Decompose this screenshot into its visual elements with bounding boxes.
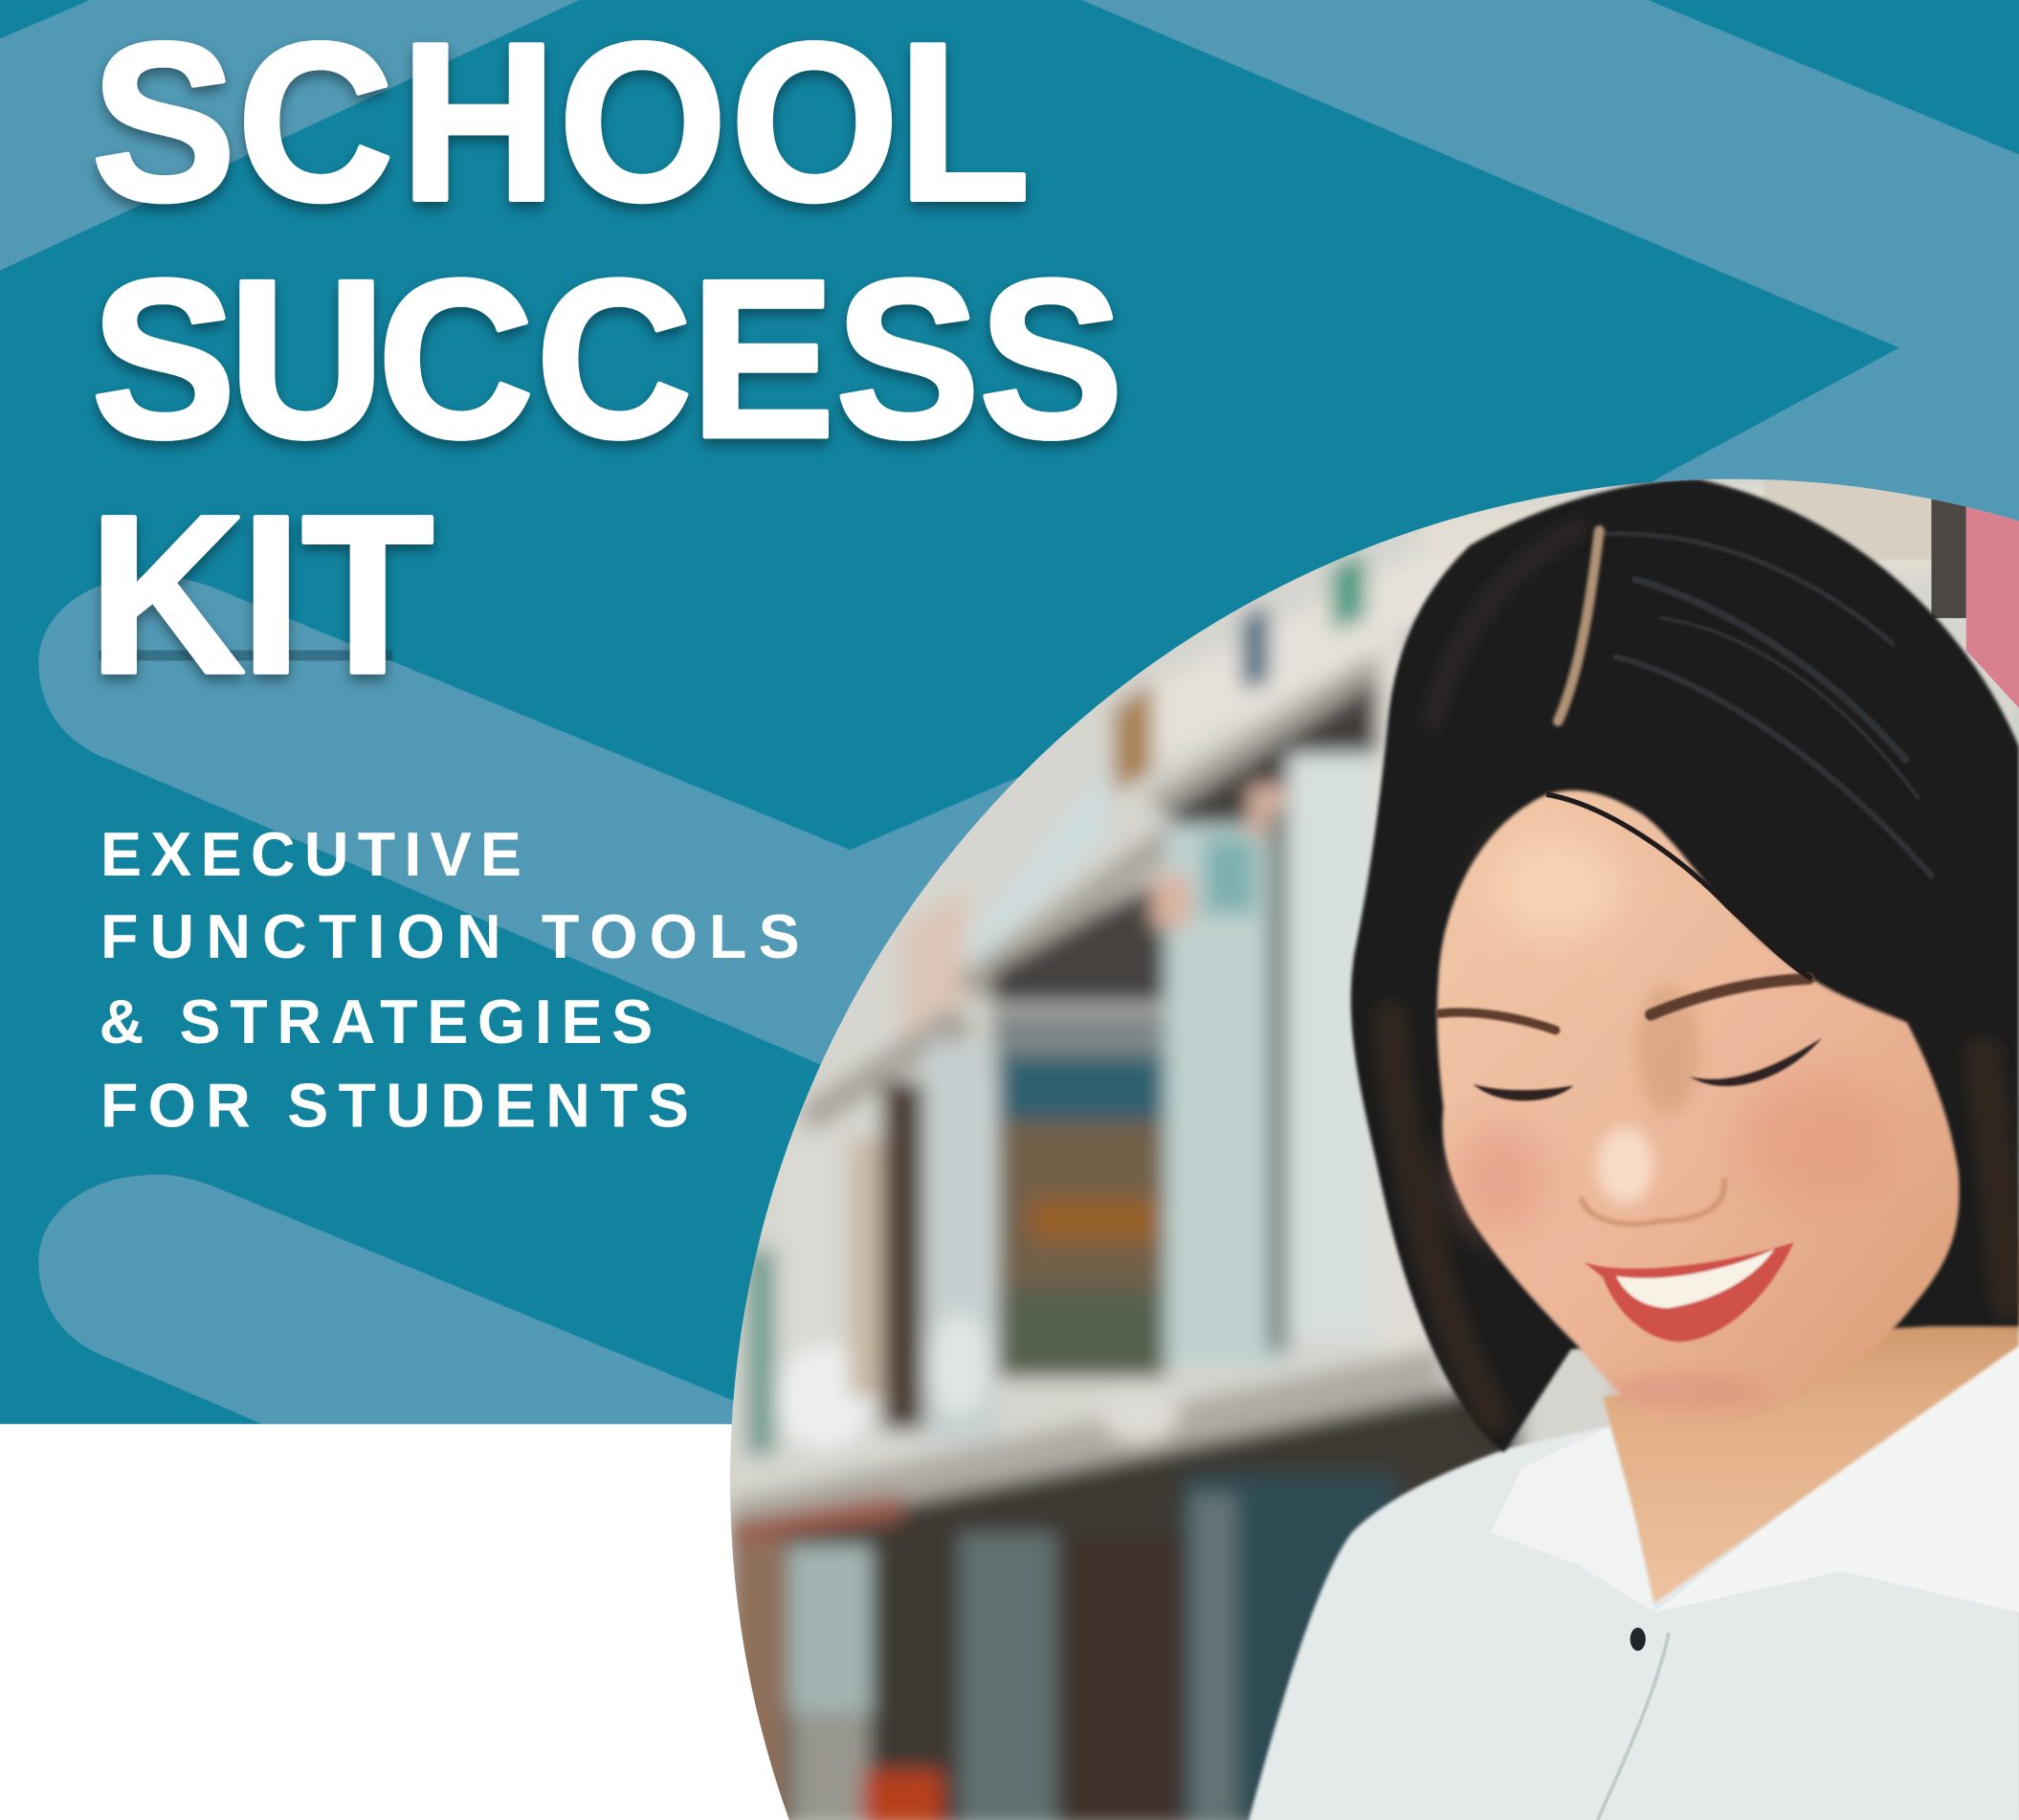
- title line: kit: KIT: [89, 468, 433, 720]
- top right shelf and pink panel: [1764, 470, 2019, 708]
- title: [89, 0, 1123, 720]
- woman: face: [1437, 790, 1960, 1427]
- woman: neck: [1603, 1236, 2019, 1603]
- teal header background: [0, 0, 2019, 1424]
- subtitle: [100, 820, 800, 1140]
- blurred bookshelf background: [696, 463, 2019, 1820]
- woman: smile: [1584, 1243, 1794, 1342]
- white lower panel: [0, 1424, 2019, 1820]
- woman: hair parting: [1558, 530, 1599, 721]
- woman: front hair strand: [1546, 794, 1811, 979]
- woman: eyes: [1473, 1038, 1822, 1100]
- woman: shirt: [1247, 1326, 2019, 1820]
- woman: hair: [1351, 479, 2019, 1453]
- title line: school: SCHOOL: [92, 0, 1031, 248]
- subtitle line 3: & STRATEGIES: [100, 988, 653, 1056]
- underline behind kit: [100, 651, 392, 660]
- title line: success: SUCCESS: [92, 233, 1123, 484]
- subtitle line 4: FOR STUDENTS: [100, 1071, 689, 1140]
- subtitle line 1: EXECUTIVE: [100, 820, 521, 889]
- woman: hair sheen: [1597, 534, 1931, 876]
- woman: eyebrows: [1439, 979, 1809, 1031]
- photo: student in library: [696, 463, 2019, 1820]
- subtitle line 2: FUNCTION TOOLS: [100, 902, 800, 971]
- woman: hair lower brown tones: [1390, 528, 2008, 1416]
- woman: facial shading: [1455, 837, 1893, 1409]
